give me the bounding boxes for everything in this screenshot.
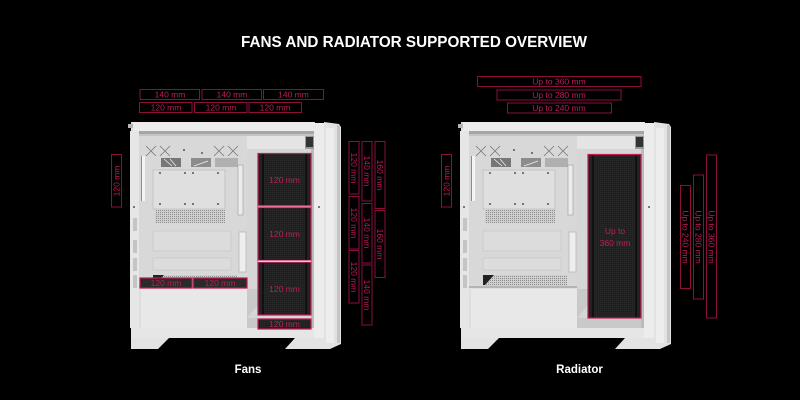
fan mounts: right side: 120 mm — [269, 284, 300, 294]
top labels: 120 mm — [140, 102, 302, 112]
rear label: 120 mm: 120 mm — [442, 166, 452, 196]
top labels: 120 mm: 120 mm — [260, 102, 290, 112]
right labels: 160 mm column — [375, 142, 385, 278]
right labels: radiator sizes: Up to 360 mm — [706, 210, 716, 264]
case illustration: fans — [128, 122, 341, 349]
top labels: radiator sizes: Up to 360 mm — [532, 76, 586, 86]
fan mounts: bottom: 120 mm — [151, 278, 181, 288]
right labels: radiator sizes — [680, 155, 716, 318]
rear label: 120 mm — [442, 154, 452, 207]
top labels: 140 mm: 140 mm — [278, 90, 309, 100]
right labels: 120 mm column — [349, 142, 359, 303]
panel: fans — [112, 90, 385, 376]
top labels: 140 mm: 140 mm — [217, 90, 247, 100]
radiator mount: right side: 360 mm — [600, 238, 630, 248]
caption: radiator: Radiator — [556, 364, 603, 376]
radiator mount: right side — [588, 154, 641, 318]
panel: radiator — [442, 76, 716, 376]
fan mounts: bottom — [140, 278, 247, 288]
right labels: radiator sizes: Up to 280 mm — [694, 210, 704, 264]
right labels: 140 mm column: 140 mm — [362, 280, 372, 310]
fan mounts: right side — [258, 153, 311, 329]
right labels: 120 mm column: 120 mm — [349, 262, 359, 292]
rear label: 120 mm: 120 mm — [112, 166, 122, 196]
fan mounts: right side: 120 mm — [269, 229, 300, 239]
case illustration: radiator — [458, 122, 671, 349]
top labels: radiator sizes: Up to 280 mm — [532, 90, 586, 100]
right labels: 120 mm column: 120 mm — [349, 153, 359, 183]
top labels: 140 mm: 140 mm — [155, 90, 185, 100]
right labels: 160 mm column: 160 mm — [375, 229, 385, 259]
right labels: radiator sizes: Up to 240 mm — [680, 210, 690, 264]
fan mounts: bottom: 120 mm — [205, 278, 235, 288]
rear label: 120 mm — [112, 154, 122, 207]
caption: fans: Fans — [235, 364, 261, 376]
radiator mount: right side: Up to — [605, 226, 625, 236]
top labels: radiator sizes: Up to 240 mm — [532, 103, 586, 113]
top labels: radiator sizes — [478, 76, 641, 113]
top labels: 140 mm — [140, 90, 324, 100]
right labels: 160 mm column: 160 mm — [375, 160, 385, 190]
top labels: 120 mm: 120 mm — [206, 102, 236, 112]
right labels: 120 mm column: 120 mm — [349, 208, 359, 238]
fan mounts: right side: 120 mm — [269, 319, 300, 329]
title: FANS AND RADIATOR SUPPORTED OVERVIEW — [241, 34, 588, 51]
right labels: 140 mm column — [362, 142, 372, 325]
right labels: 140 mm column: 140 mm — [362, 156, 372, 186]
fan mounts: right side: 120 mm — [269, 175, 300, 185]
top labels: 120 mm: 120 mm — [151, 102, 181, 112]
right labels: 140 mm column: 140 mm — [362, 218, 372, 248]
